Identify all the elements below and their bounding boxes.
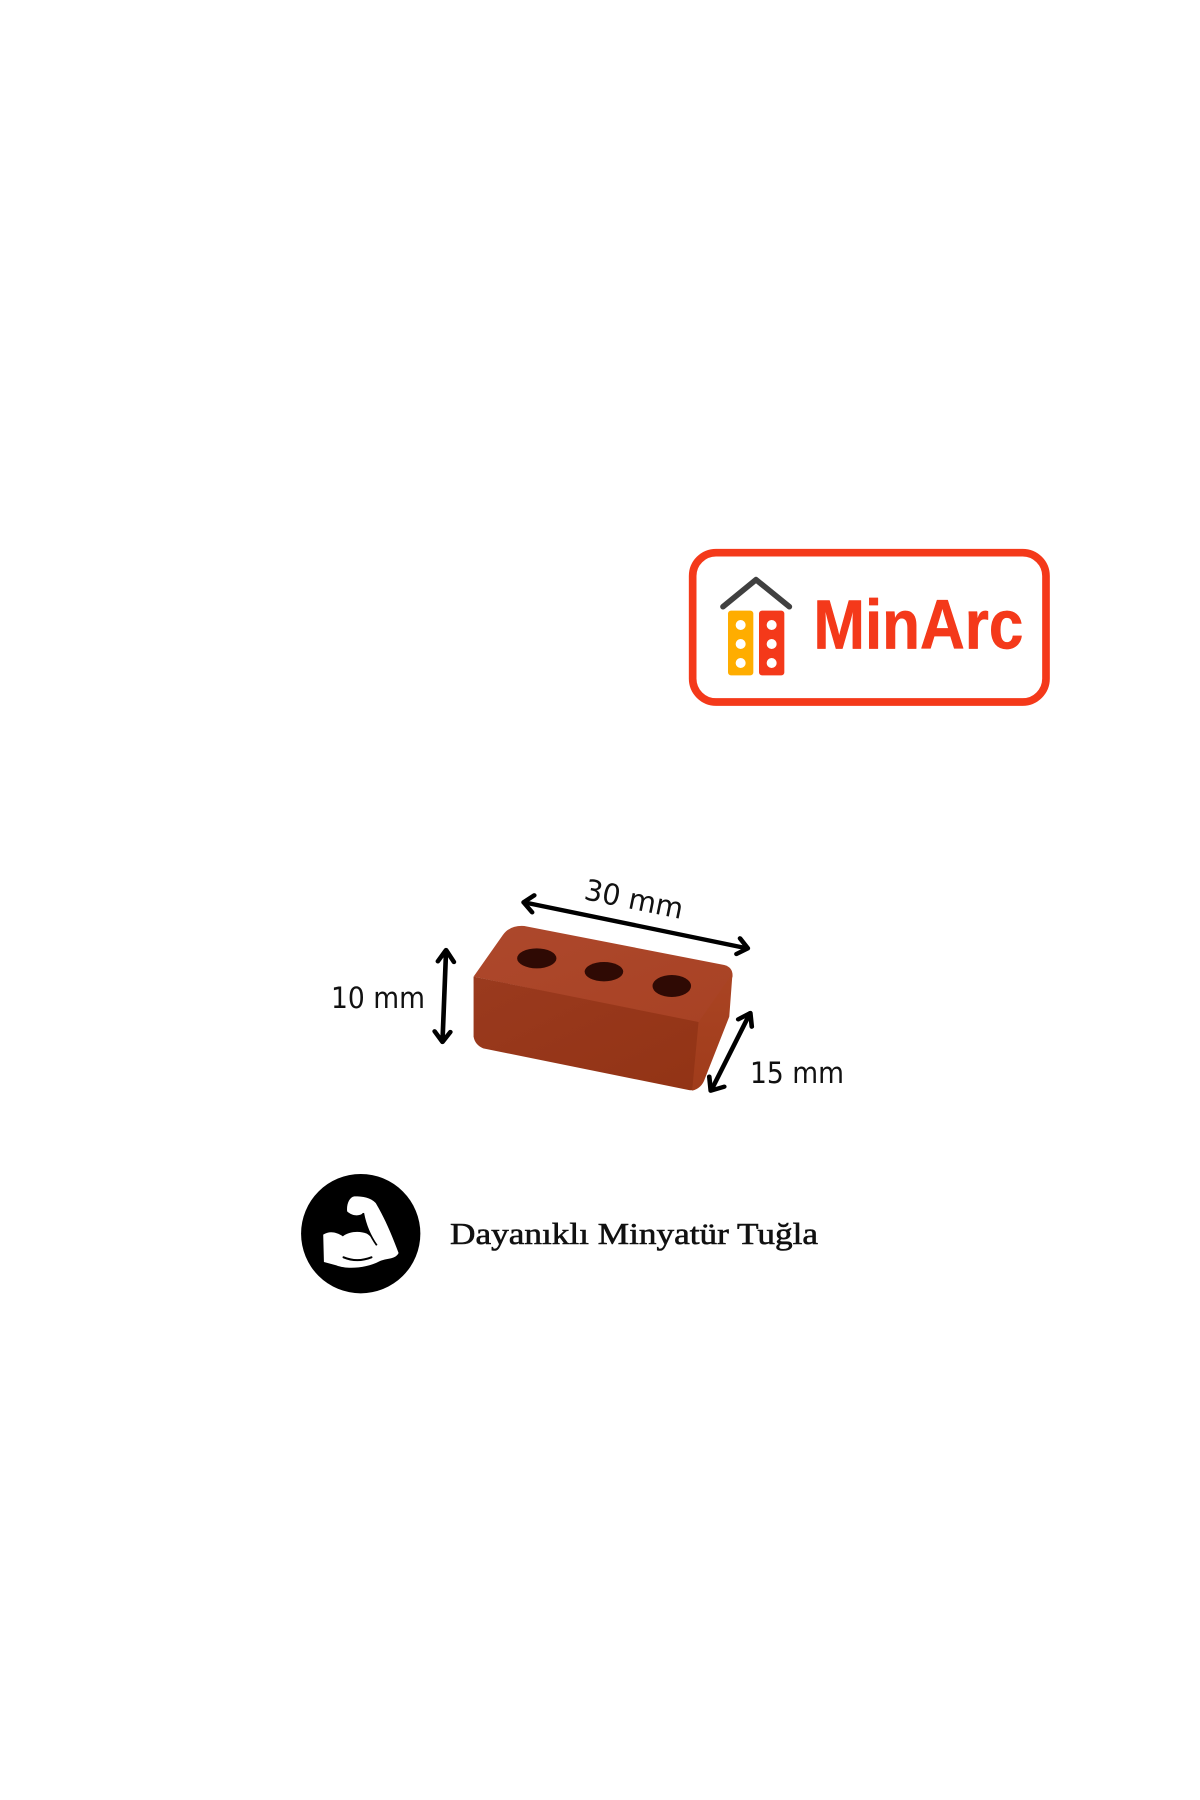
label: 30 mm: 30 mm: [582, 873, 686, 926]
brick hole middle: [585, 962, 623, 981]
feature text: Dayanıklı Minyatür Tuğla: [450, 1216, 818, 1251]
brick with dimensions: [331, 873, 844, 1091]
brick and arrows: [435, 895, 752, 1091]
brick hole right: [652, 975, 691, 997]
arrow: 30 mm: [524, 895, 748, 954]
label: 10 mm: 10 mm: [331, 981, 425, 1015]
icon: flexed arm in black circle: [301, 1174, 420, 1293]
brick top face: [474, 926, 733, 1023]
icon: red brick: [759, 611, 784, 675]
arrow: 10 mm: [435, 950, 454, 1042]
brick side face: [692, 973, 732, 1091]
label: 15 mm: 15 mm: [750, 1056, 844, 1090]
brick hole left: [517, 948, 556, 968]
icon: house roof: [723, 580, 789, 607]
logo border: [693, 553, 1046, 702]
logo: MinArc: [693, 553, 1046, 702]
arrow: 15 mm: [709, 1013, 752, 1091]
brick photo illustration: [474, 926, 733, 1091]
brick front face: [474, 977, 699, 1090]
feature row: durable brick: [301, 1174, 818, 1293]
icon: yellow brick: [728, 611, 753, 675]
logo wordmark: MinArc: [813, 586, 1023, 664]
